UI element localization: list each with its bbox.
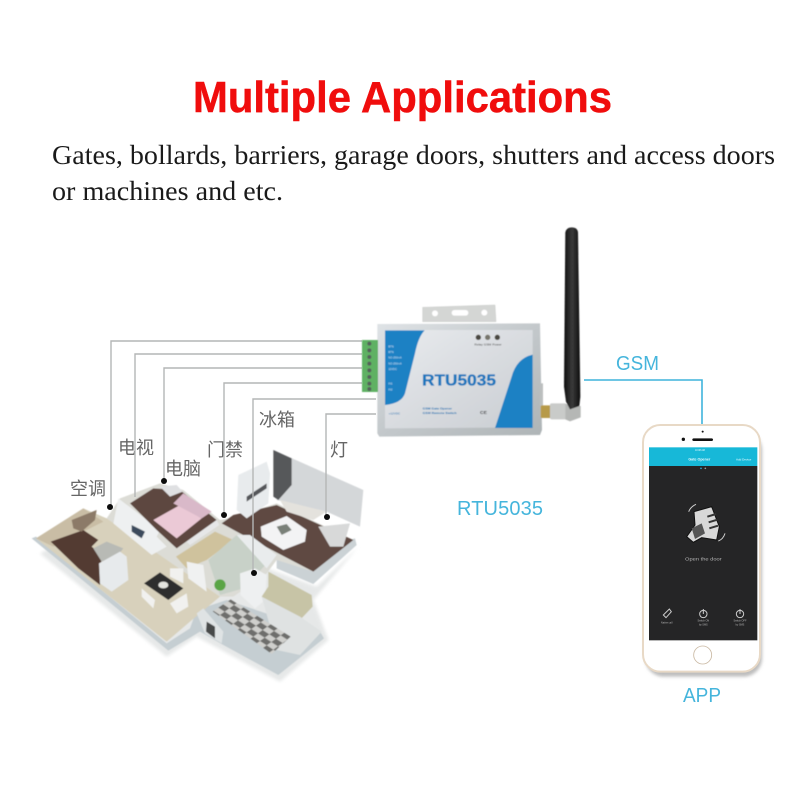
fist knock icon	[687, 504, 725, 542]
green terminal block	[362, 340, 378, 392]
entry block	[197, 608, 223, 643]
checkered kitchen floor	[213, 599, 291, 654]
antenna	[564, 227, 580, 409]
side connector	[540, 383, 543, 417]
floor plan illustration	[32, 450, 363, 682]
RTU5035 label: RTU5035	[457, 498, 543, 520]
terminal labels: NO-250mA	[388, 356, 402, 360]
app header text: Gate Opener	[688, 458, 711, 462]
mounting bracket	[423, 305, 496, 322]
appliance labels: 电脑	[165, 459, 201, 479]
phone body	[643, 425, 760, 672]
earpiece and camera	[682, 431, 713, 441]
bathroom	[208, 535, 273, 595]
title: Multiple Applications	[193, 73, 612, 122]
living room wall area	[36, 508, 103, 547]
bed pink	[153, 505, 202, 538]
main floor	[36, 508, 220, 642]
small label text	[389, 406, 457, 415]
right bed	[261, 516, 307, 550]
description text: Gates, bollards, barriers, garage doors, shutters and access doors	[52, 140, 775, 170]
appliance labels: 空调	[70, 479, 106, 499]
bottom app buttons: Native call	[661, 621, 673, 624]
model name: RTU5035	[422, 373, 496, 390]
terminal labels: IN1	[388, 382, 393, 386]
terminal labels: BTN	[388, 344, 394, 348]
main bedroom floor	[130, 488, 217, 548]
metal enclosure	[377, 323, 542, 437]
bottom app buttons	[661, 609, 747, 627]
right bedroom floor	[222, 505, 353, 572]
interior base	[107, 483, 353, 597]
appliance labels: 电视	[118, 438, 154, 458]
LED indicators	[474, 335, 502, 347]
hallway tile	[176, 532, 233, 568]
bottom app buttons: by SMS	[699, 624, 708, 627]
app screen	[649, 466, 757, 640]
blue left label panel	[385, 330, 425, 405]
bottom app buttons: Switch OFF	[734, 620, 747, 623]
cabinet near living room	[99, 552, 128, 592]
controller device RTU5035	[362, 227, 581, 437]
right bedroom back wall	[273, 450, 363, 527]
plant	[214, 579, 226, 591]
description text: or machines and etc.	[52, 176, 283, 206]
pager dots	[700, 467, 702, 469]
appliance labels	[70, 410, 348, 499]
smartphone with app	[643, 425, 762, 677]
app header bar	[649, 447, 757, 466]
small label text: GSM Remote Switch	[423, 411, 457, 415]
TV wall unit	[113, 498, 167, 555]
GSM connection line	[584, 380, 702, 426]
terminal labels: IN2	[388, 388, 393, 392]
bedside furniture	[318, 523, 350, 547]
terminal labels	[388, 344, 402, 392]
app header text: Add Device	[736, 458, 752, 462]
location dots	[107, 478, 330, 576]
phone shadow	[645, 432, 762, 677]
open the door text: Open the door	[685, 556, 722, 561]
CE mark: CE	[480, 410, 488, 416]
terminal labels: NO-250mA	[388, 361, 402, 365]
appliance labels: 灯	[330, 440, 348, 460]
dining table	[144, 572, 183, 600]
bottom app buttons: Switch ON	[697, 620, 709, 623]
app header text: 10:08 AM	[695, 449, 705, 452]
front label	[385, 330, 533, 428]
APP label: APP	[683, 685, 721, 707]
small label text: GSM Gate Opener	[423, 406, 453, 410]
terminal labels: 12VDC	[388, 367, 397, 371]
LED indicators: Relay GSM Power	[474, 343, 502, 347]
terminal labels: BTN	[388, 350, 394, 354]
GSM label: GSM	[616, 353, 659, 375]
antenna connector	[541, 403, 581, 421]
sofa	[51, 530, 102, 585]
description text	[52, 140, 775, 206]
appliance labels: 冰箱	[259, 410, 295, 430]
blue right label panel	[495, 355, 533, 428]
home button	[694, 646, 712, 664]
app header text	[688, 449, 752, 462]
kitchen back counter	[262, 572, 313, 620]
bottom app buttons: by SMS	[736, 624, 745, 627]
outer walls	[32, 537, 324, 675]
floor soft shadow	[40, 513, 358, 682]
small label text: +12VDC	[389, 411, 401, 415]
wiring lines from controller to appliances	[111, 341, 376, 573]
wardrobe	[237, 462, 270, 518]
appliance labels: 门禁	[207, 440, 243, 460]
refrigerator column	[240, 568, 267, 608]
